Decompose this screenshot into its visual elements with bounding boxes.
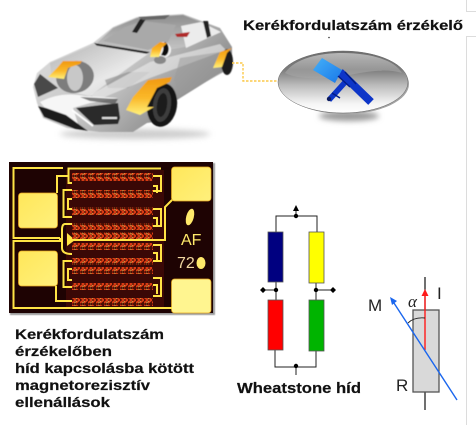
angle arc bbox=[408, 318, 425, 323]
disc rim bbox=[281, 54, 409, 114]
sensor icon bbox=[313, 58, 371, 102]
chip caption: magnetorezisztív bbox=[15, 377, 150, 393]
chip caption: híd kapcsolásba kötött bbox=[15, 360, 194, 376]
car bumper and front grille bbox=[34, 74, 58, 97]
chip shadow bbox=[10, 163, 215, 315]
resistor body bbox=[413, 310, 439, 392]
car hood bbox=[50, 45, 148, 96]
red resistor bbox=[268, 300, 283, 350]
blue resistor bbox=[268, 232, 283, 282]
chip caption: ellenállások bbox=[15, 394, 110, 410]
car shadow bbox=[60, 129, 210, 139]
magnetoresistor diagram bbox=[368, 277, 457, 410]
car illustration bbox=[33, 14, 233, 139]
small dot bbox=[328, 37, 330, 38]
magnetoresistor diagram: α bbox=[408, 292, 418, 311]
disc shadow bbox=[319, 111, 379, 121]
chip markings bbox=[177, 208, 206, 272]
chip bbox=[9, 162, 215, 315]
green resistor bbox=[309, 300, 324, 351]
chip caption bbox=[15, 326, 194, 410]
magnetoresistor diagram: R bbox=[396, 376, 408, 395]
disc bbox=[278, 51, 408, 113]
wheel: rear right with arch bbox=[213, 48, 233, 75]
current arrow bbox=[424, 296, 426, 350]
bridge nodes bbox=[260, 205, 336, 368]
chip markings: 72 bbox=[177, 255, 195, 272]
wheel: front left with arch bbox=[48, 57, 97, 97]
dotted connector bbox=[232, 63, 278, 81]
disc highlight bbox=[285, 53, 402, 78]
magnetoresistor diagram: I bbox=[437, 284, 442, 303]
magnetoresistor rows bbox=[72, 173, 153, 306]
sensor disc bbox=[278, 51, 409, 121]
title: Kerékfordulatszám érzékelő bbox=[243, 17, 463, 33]
Wheatstone caption: Wheatstone híd bbox=[237, 381, 361, 397]
car body bbox=[33, 14, 232, 132]
Wheatstone bridge bbox=[260, 205, 336, 375]
page border line bbox=[466, 0, 476, 425]
wheel: front right with arch bbox=[126, 77, 180, 129]
leads bbox=[424, 277, 426, 410]
labels: M bbox=[368, 296, 382, 315]
car roof and windows bbox=[97, 15, 220, 53]
bridge wires bbox=[264, 206, 333, 375]
bond pads bbox=[18, 167, 211, 313]
wheel: rear left with arch bbox=[150, 42, 171, 64]
chip markings: AF bbox=[181, 232, 202, 249]
chip substrate bbox=[9, 162, 213, 313]
yellow resistor bbox=[309, 232, 324, 283]
magnetization arrow bbox=[392, 300, 457, 400]
conductors bbox=[14, 168, 172, 308]
chip caption: érzékelőben bbox=[15, 343, 112, 359]
chip caption: Kerékfordulatszám bbox=[15, 326, 164, 342]
